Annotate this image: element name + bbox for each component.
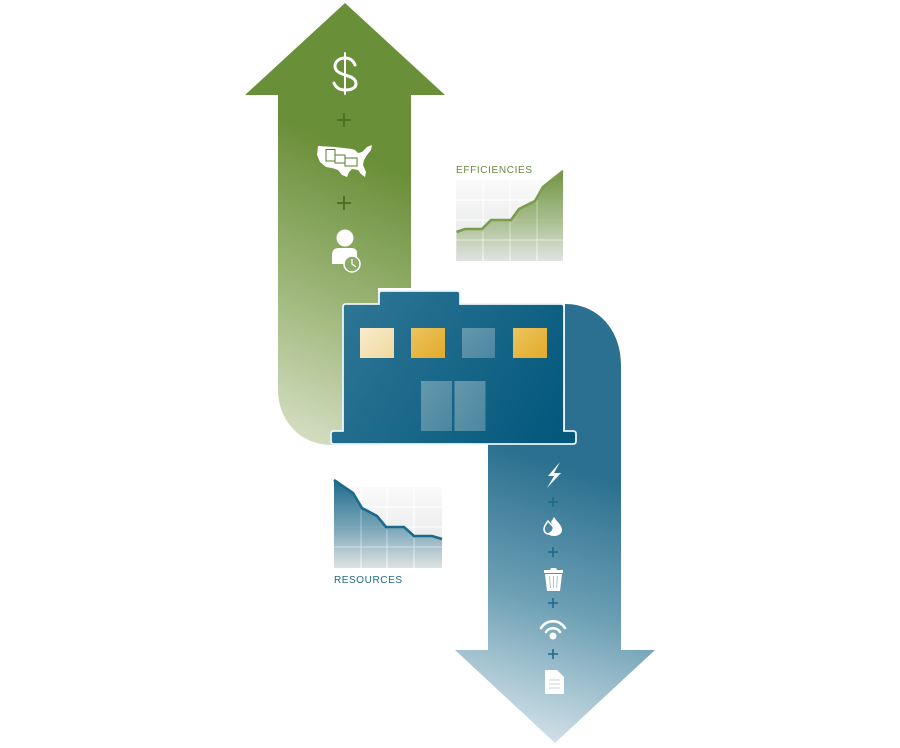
chart panel [334, 487, 442, 568]
plus sign [337, 113, 351, 127]
plus sign [548, 598, 558, 608]
chart label: RESOURCES [334, 575, 402, 586]
window 2 [411, 328, 445, 358]
plus sign [548, 547, 558, 557]
chart line [334, 480, 442, 539]
window 3 [462, 328, 495, 358]
blue down arrow [455, 304, 655, 743]
icon: trash can [544, 568, 563, 591]
chart label: EFFICIENCIES [456, 165, 532, 176]
icon: dollar sign [334, 53, 356, 94]
green up arrow [245, 3, 445, 445]
building [331, 291, 576, 444]
left door [421, 381, 452, 431]
building body [331, 291, 576, 444]
chart: efficiencies [456, 165, 563, 261]
plus sign [337, 196, 351, 210]
icon: document [545, 670, 564, 694]
window 4 [513, 328, 547, 358]
right door [454, 381, 486, 431]
chart panel [456, 180, 563, 261]
chart line [456, 171, 563, 232]
icon: lightning bolt [547, 462, 561, 488]
chart: resources [334, 480, 442, 586]
icon: wifi signal [541, 621, 565, 640]
icon: US map with buildings [317, 145, 372, 177]
icon: person with clock [332, 230, 360, 272]
chart area [456, 171, 563, 261]
plus sign [548, 497, 558, 507]
chart area [334, 480, 442, 568]
icon: water drops [544, 517, 562, 536]
window 1 [360, 328, 394, 358]
plus sign [548, 649, 558, 659]
